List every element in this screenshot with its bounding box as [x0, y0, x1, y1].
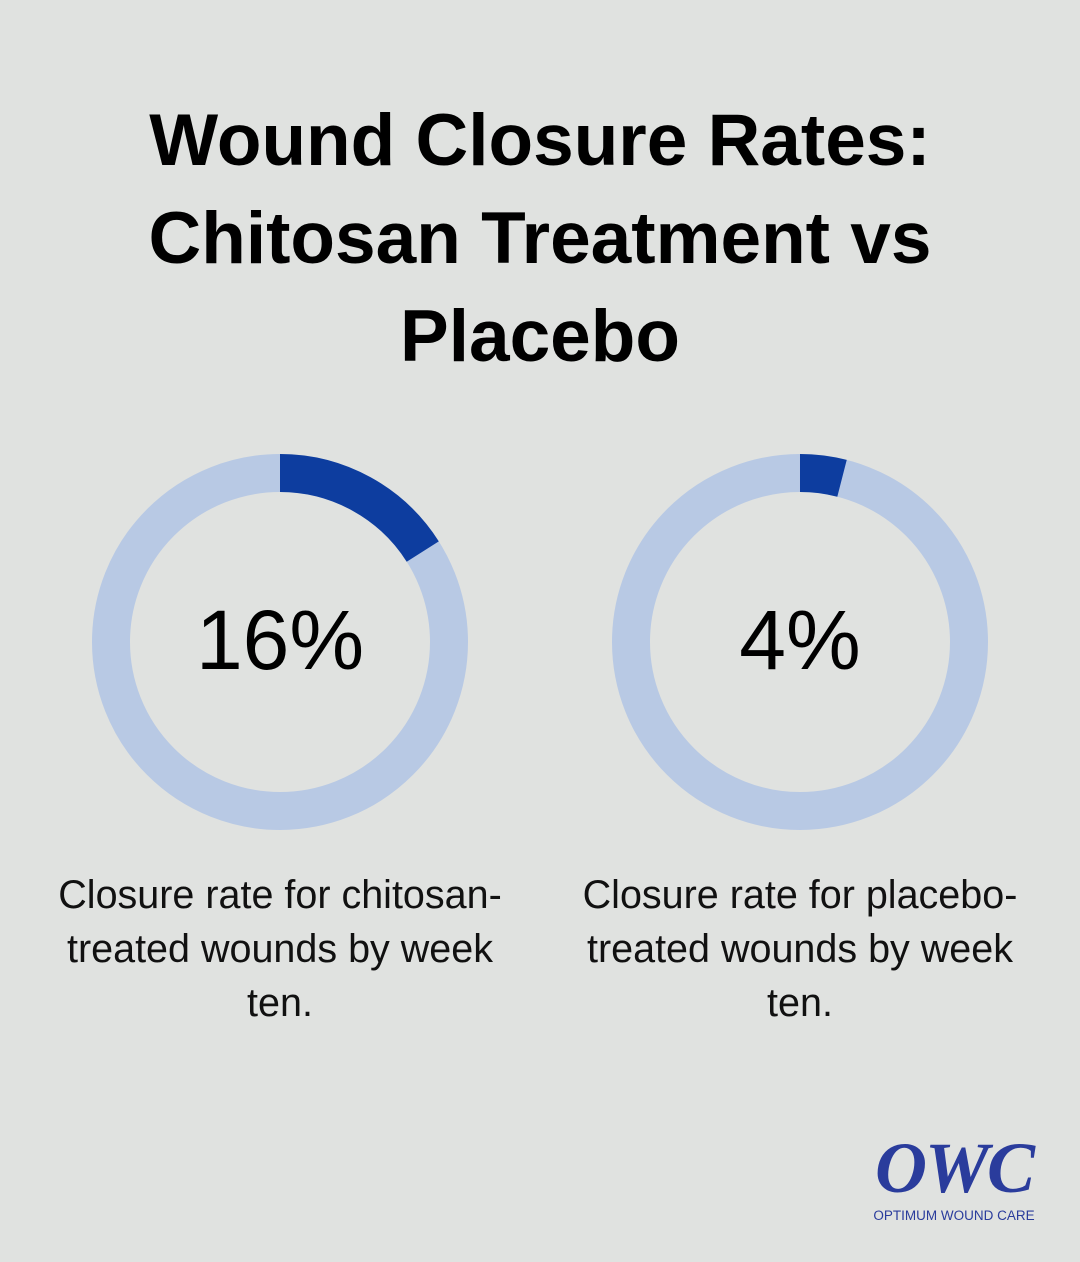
title: Chitosan Treatment vs	[149, 198, 931, 279]
title: Wound Closure Rates:	[149, 100, 931, 181]
caption: chitosan	[58, 873, 502, 1025]
logo: OWC: OPTIMUM WOUND CARE	[873, 1208, 1035, 1223]
logo: OWC: OWC	[875, 1128, 1033, 1208]
caption: chitosan: Closure rate for chitosan-	[58, 873, 502, 917]
donut chart: placebo 4%	[612, 454, 988, 830]
caption: placebo: Closure rate for placebo-	[583, 873, 1017, 917]
percentage: 4%: 4%	[739, 593, 861, 687]
title: Placebo	[400, 296, 680, 377]
caption: placebo: ten.	[767, 981, 833, 1025]
caption: placebo	[583, 873, 1017, 1025]
caption: placebo: treated wounds by week	[587, 927, 1013, 971]
title	[149, 100, 931, 377]
donut chart: chitosan 16%	[92, 454, 468, 830]
caption: chitosan: treated wounds by week	[67, 927, 493, 971]
caption: chitosan: ten.	[247, 981, 313, 1025]
percentage: 16%: 16%	[196, 593, 364, 687]
